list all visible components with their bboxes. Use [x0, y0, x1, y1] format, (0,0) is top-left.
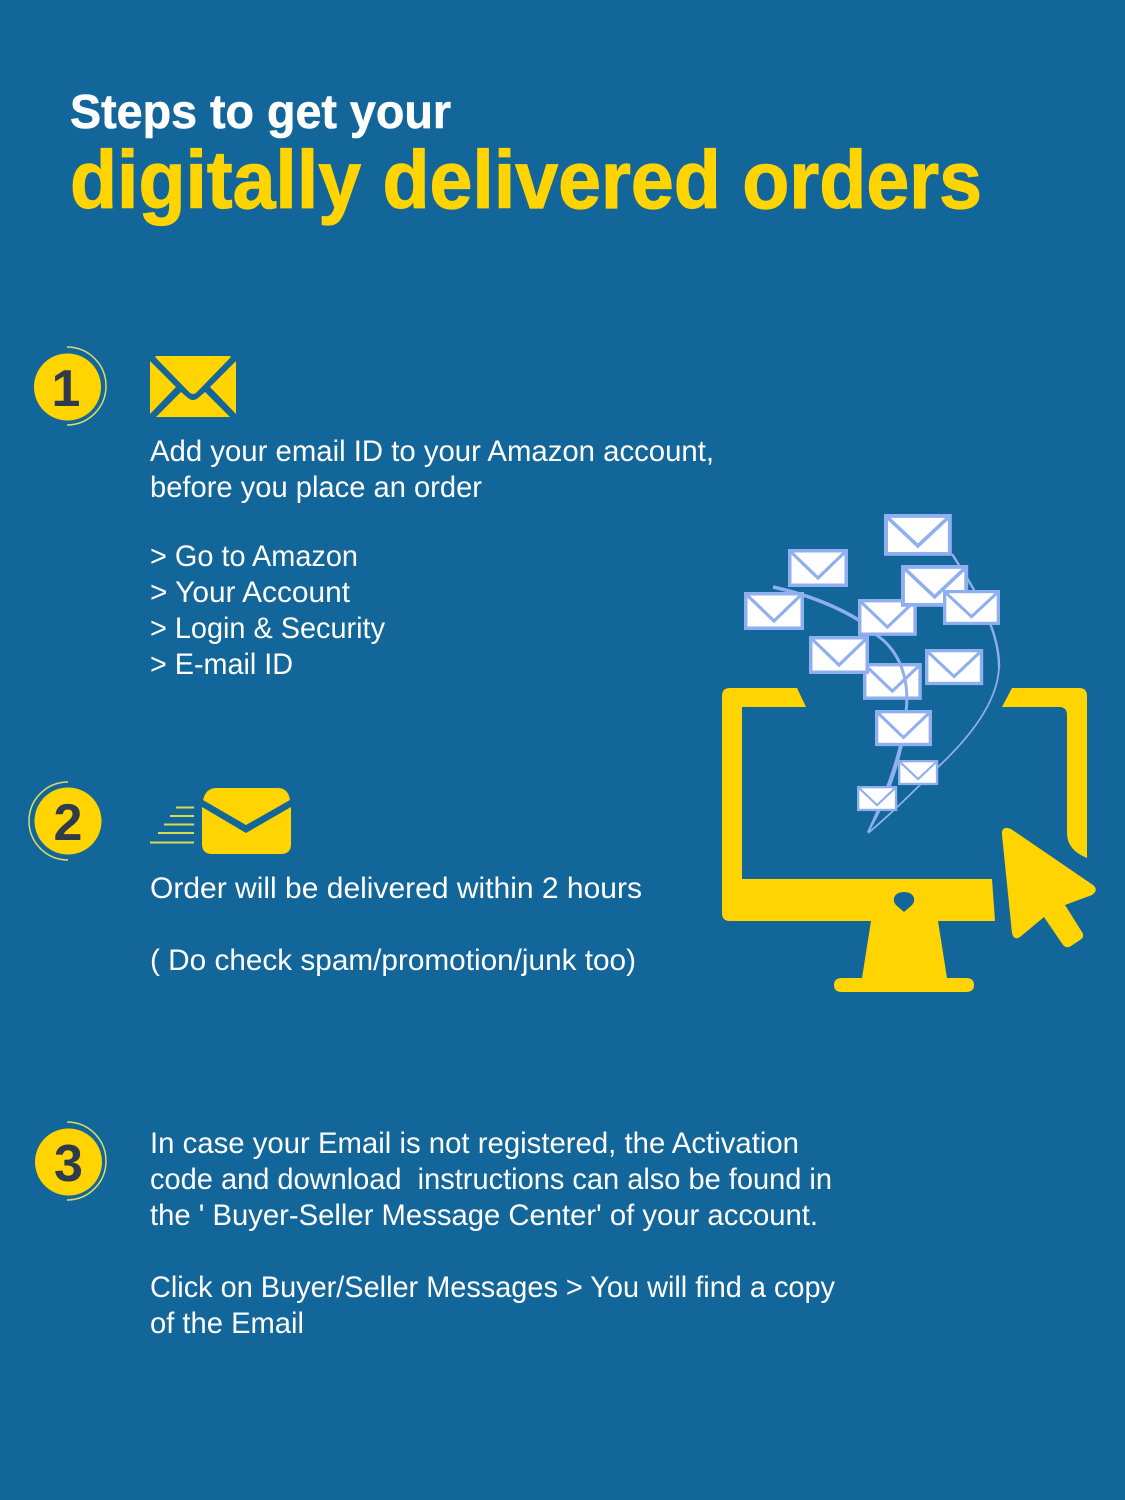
step 3 badge	[35, 1122, 106, 1200]
monitor button	[894, 892, 914, 912]
step 1 badge: 1	[52, 360, 80, 418]
illustration: flying emails	[746, 516, 999, 833]
step 3 text	[150, 1127, 835, 1340]
step 1 text	[150, 435, 714, 681]
step 2 text: ( Do check spam/promotion/junk too)	[150, 944, 636, 977]
icon: fast envelope	[150, 788, 291, 854]
step 3 text: Click on Buyer/Seller Messages > You will find a copy	[150, 1271, 835, 1304]
step 1 text: > Your Account	[150, 576, 351, 609]
step 1 badge	[34, 347, 106, 425]
step 1 text: Add your email ID to your Amazon account,	[150, 435, 714, 468]
step 1 text: > E-mail ID	[150, 648, 293, 681]
title: digitally delivered orders	[70, 135, 982, 226]
step 1 text: before you place an order	[150, 471, 482, 504]
step 3 text: code and download instructions can also be found in	[150, 1163, 832, 1196]
step 3 text: the ' Buyer-Seller Message Center' of your account.	[150, 1199, 818, 1232]
step 3 text: In case your Email is not registered, the Activation	[150, 1127, 799, 1160]
title	[70, 86, 982, 226]
step 3 text: of the Email	[150, 1307, 304, 1340]
icon: envelope	[150, 356, 236, 417]
step 2 badge	[29, 782, 102, 860]
step 1 text: > Go to Amazon	[150, 540, 358, 573]
step 2 text	[150, 872, 642, 977]
title: Steps to get your	[70, 86, 451, 139]
step 2 text: Order will be delivered within 2 hours	[150, 872, 642, 905]
illustration: monitor	[722, 688, 1096, 992]
cursor arrow	[1002, 828, 1096, 947]
step 3 badge: 3	[54, 1135, 83, 1193]
step 2 badge: 2	[54, 794, 82, 852]
step 1 text: > Login & Security	[150, 612, 385, 645]
